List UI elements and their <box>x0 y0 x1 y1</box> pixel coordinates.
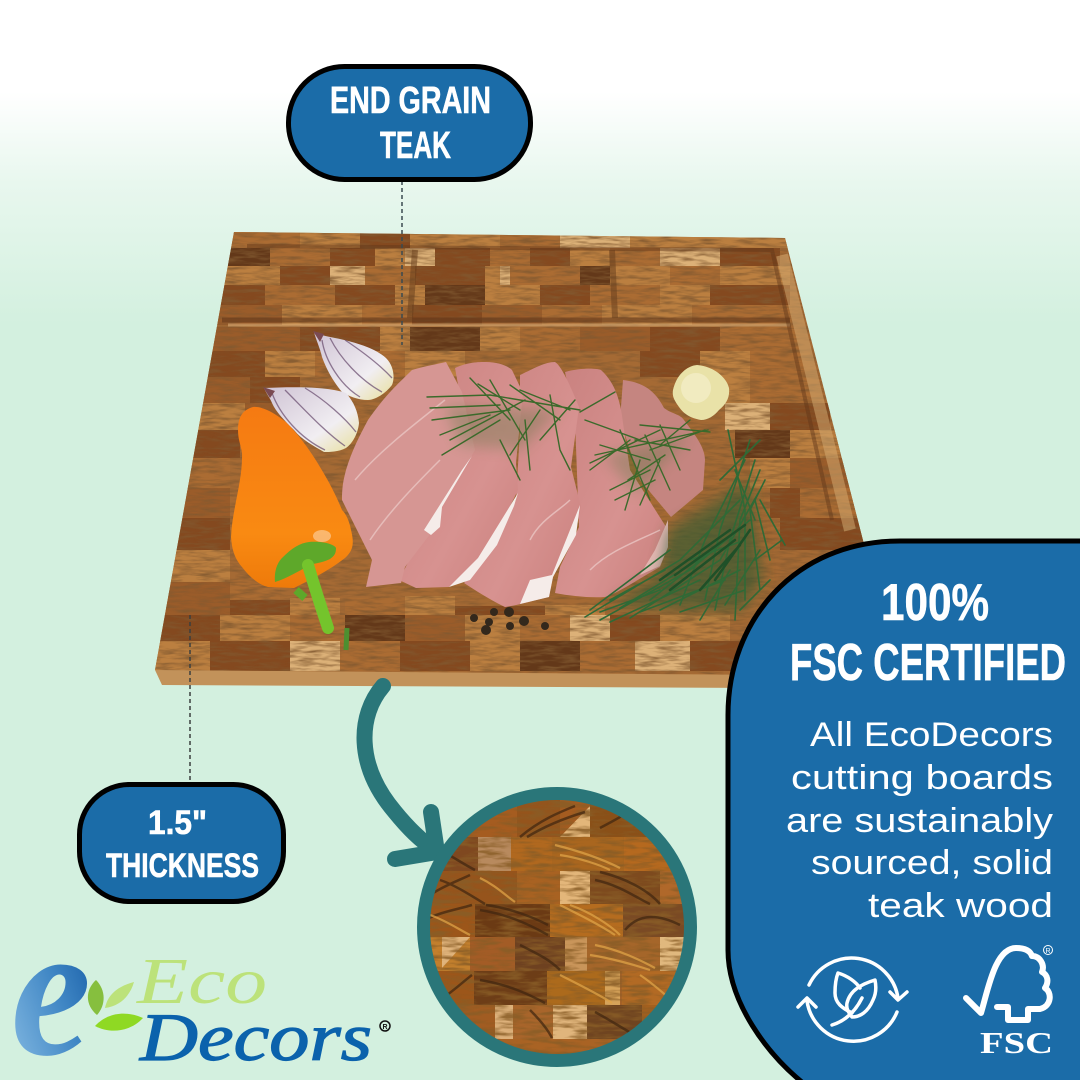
icon: FSC logo: R <box>1046 948 1051 955</box>
board side face <box>155 670 760 688</box>
icon: FSC logo <box>966 946 1053 1060</box>
meat slices <box>342 362 705 607</box>
icon: FSC logo: FSC <box>980 1025 1053 1060</box>
EcoDecors logo: Eco <box>136 945 267 1018</box>
callout: thickness <box>80 784 284 902</box>
slice 5 <box>620 380 705 517</box>
callout: end grain teak <box>288 66 530 180</box>
panel: FSC certified <box>728 541 1080 1080</box>
panel body text: All EcoDecors <box>810 716 1053 754</box>
orange pepper <box>231 407 353 650</box>
slice 1 <box>342 362 475 587</box>
dotted leader: end grain <box>401 181 403 345</box>
panel body text: are sustainably <box>786 802 1053 840</box>
cutting board <box>155 232 864 688</box>
close-up circle of end grain <box>420 790 700 1070</box>
EcoDecors logo: R <box>382 1024 388 1031</box>
panel body text: sourced, solid <box>811 844 1053 882</box>
garlic clove <box>673 365 729 420</box>
dill sprigs <box>427 378 785 622</box>
dotted leader: thickness <box>189 615 191 782</box>
food arrangement <box>231 331 785 650</box>
callout: thickness: 1.5" <box>148 804 207 842</box>
slice 2 <box>399 362 523 588</box>
slice 3 <box>464 362 581 607</box>
pepper stem <box>275 542 336 582</box>
arrow to close-up <box>365 686 437 859</box>
EcoDecors logo <box>11 886 390 1080</box>
panel heading: 100% <box>881 574 989 632</box>
panel body text: cutting boards <box>791 759 1053 797</box>
panel heading <box>790 574 1066 692</box>
board top surface <box>155 232 864 675</box>
callout: end grain teak: END GRAIN <box>330 80 491 122</box>
peppercorns <box>470 607 549 635</box>
EcoDecors logo: Decors <box>139 999 372 1075</box>
callout: end grain teak: TEAK <box>380 125 451 167</box>
callout: thickness: THICKNESS <box>106 847 259 885</box>
fat edges <box>424 456 580 604</box>
panel body text <box>786 716 1053 925</box>
slice 4 <box>555 369 668 597</box>
icon: recycling leaf <box>798 958 907 1041</box>
panel body text: teak wood <box>868 887 1053 925</box>
red onion halves <box>263 331 394 452</box>
